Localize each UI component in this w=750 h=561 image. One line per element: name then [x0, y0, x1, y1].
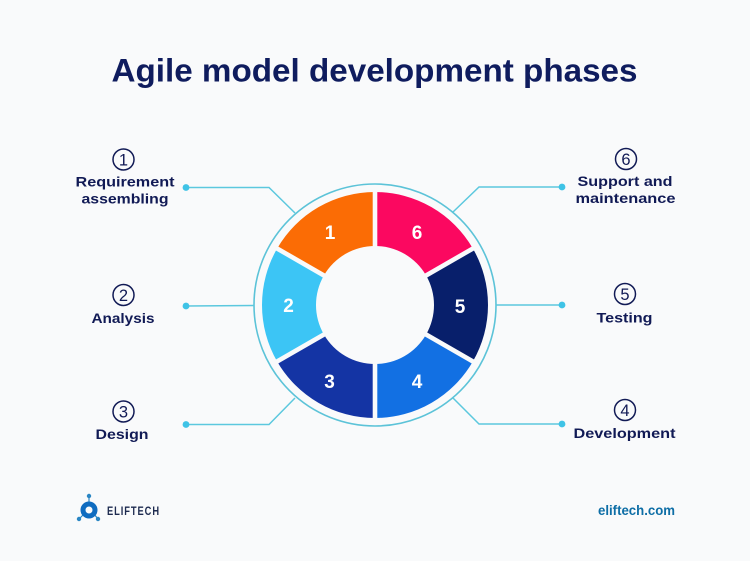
- label 1: requirement assembling: [76, 149, 175, 206]
- segment 4: [375, 334, 473, 418]
- outer ring: [254, 184, 496, 426]
- segment numbers: [283, 223, 466, 393]
- title: Agile model development phases: [112, 52, 638, 88]
- label 2: analysis: [92, 284, 155, 326]
- logo wordmark: ELIFTECH: [107, 504, 160, 518]
- segment 6: [375, 192, 473, 276]
- connector lines: [186, 187, 562, 424]
- logo icon: [77, 494, 100, 521]
- label 4: development: [574, 400, 676, 441]
- website url: eliftech.com: [598, 503, 675, 518]
- segment numbers: 5: [455, 297, 466, 318]
- label 2: analysis: Analysis: [92, 310, 155, 326]
- label 4: development: Development: [574, 425, 676, 441]
- label 5: testing: Testing: [596, 310, 652, 326]
- segment 1: [277, 192, 375, 276]
- label 2: analysis: 2: [119, 287, 128, 305]
- segment numbers: 2: [283, 296, 294, 317]
- segment numbers: 6: [412, 223, 422, 244]
- label 4: development: 4: [620, 402, 630, 420]
- label 5: testing: 5: [620, 286, 630, 304]
- segment numbers: 3: [324, 372, 335, 393]
- label 6: support and maintenance: Support and: [578, 173, 672, 189]
- segment 2: [262, 248, 324, 362]
- label 6: support and maintenance: 6: [621, 151, 631, 169]
- logo: [77, 494, 160, 521]
- connector dots: [183, 184, 565, 428]
- segment numbers: 4: [412, 372, 423, 393]
- label 3: design: Design: [96, 426, 148, 442]
- donut chart: [254, 184, 496, 426]
- label 1: requirement assembling: assembling: [82, 190, 168, 206]
- segment 3: [277, 334, 375, 418]
- segment 5: [426, 248, 488, 362]
- segment numbers: 1: [325, 223, 336, 244]
- label 3: design: 3: [119, 404, 128, 422]
- label 6: support and maintenance: maintenance: [576, 190, 676, 206]
- label 6: support and maintenance: [576, 148, 676, 206]
- label 5: testing: [596, 284, 652, 326]
- label 3: design: [96, 401, 148, 442]
- label 1: requirement assembling: Requirement: [76, 174, 175, 190]
- label 1: requirement assembling: 1: [119, 152, 128, 170]
